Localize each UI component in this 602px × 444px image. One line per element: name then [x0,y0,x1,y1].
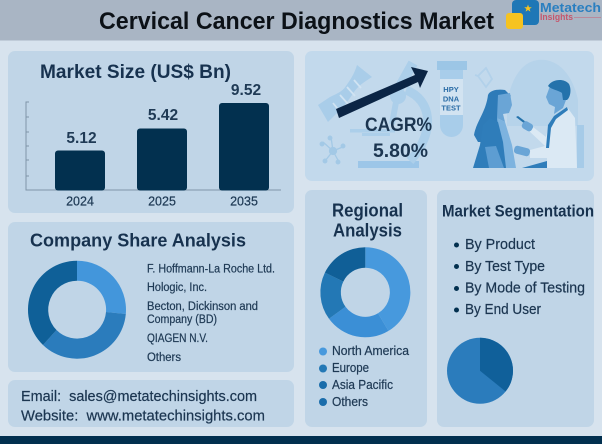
icon: HPV test tube: DNA [443,94,460,104]
text: email: Email: sales@metatechinsights.com [21,388,257,405]
icon: HPV test tube: TEST [441,104,461,112]
bar chart: 2025 [148,194,176,208]
panel: CAGR illustration [305,51,594,181]
list: segments: By End User [465,301,541,318]
panel: market segmentation [437,190,594,427]
legend: companies: Hologic, Inc. [147,282,207,294]
legend: companies: F. Hoffmann-La Roche Ltd. [147,264,275,276]
logo: Metatech Insights: Metatech [540,0,601,15]
list: segments: By Product [465,236,536,253]
title: Cervical Cancer Diagnostics Market [99,8,494,35]
illustration: molecule [320,136,345,164]
illustration: patient [473,90,516,168]
bar chart: 2035 [230,194,258,208]
legend: companies: Others [147,352,181,364]
illustration: DNA helix [318,65,372,122]
legend: regions: Others [332,395,368,409]
panel: regional analysis [305,190,427,427]
bar chart: 5.42 [148,107,178,124]
icon: HPV test tube: HPY [443,85,459,94]
legend: regions [319,344,409,409]
panel: contact [8,380,294,427]
legend: companies: QIAGEN N.V. [147,333,208,345]
pie chart: segmentation [447,338,513,404]
legend: regions: North America [332,344,409,358]
donut chart: regional [320,247,410,337]
text: CAGR: CAGR% [365,114,432,136]
footer band [0,436,602,444]
heading: company share: Company Share Analysis [30,231,246,251]
bar chart: 5.12 [66,130,97,147]
legend: companies: Company (BD) [147,314,217,326]
illustration: microscope [350,63,428,168]
heading: regional analysis: Regional [332,200,403,220]
text: website: Website: www.metatechinsights.com [21,408,265,424]
logo: Metatech Insights: Insights [540,12,573,22]
illustration: faint molecule [475,68,492,87]
heading: regional analysis: Analysis [333,220,402,240]
donut chart: company share [28,261,126,359]
icon: HPV test tube [437,61,467,137]
bar chart: 2024 [66,194,94,208]
legend: regions: Europe [332,361,369,375]
list: segments: By Mode of Testing [465,280,585,297]
arrow: growth [336,67,428,118]
logo: Metatech Insights [506,0,601,29]
bar chart [26,82,281,208]
bar chart: 9.52 [231,82,261,99]
panel: market size [8,51,294,213]
heading: regional analysis [332,200,403,240]
list: segments: By Test Type [465,258,545,275]
legend: regions: Asia Pacific [332,378,393,392]
illustration: doctor [513,80,584,168]
list: segments [454,236,585,318]
legend: companies: Becton, Dickinson and [147,301,258,313]
panel: company share analysis [8,222,294,372]
heading: market size: Market Size (US$ Bn) [40,62,231,83]
panel: CAGR illustration: 5.80% [373,140,428,162]
legend: companies [147,264,275,364]
header band [0,0,602,40]
illustration: backdrop arch [507,60,578,126]
